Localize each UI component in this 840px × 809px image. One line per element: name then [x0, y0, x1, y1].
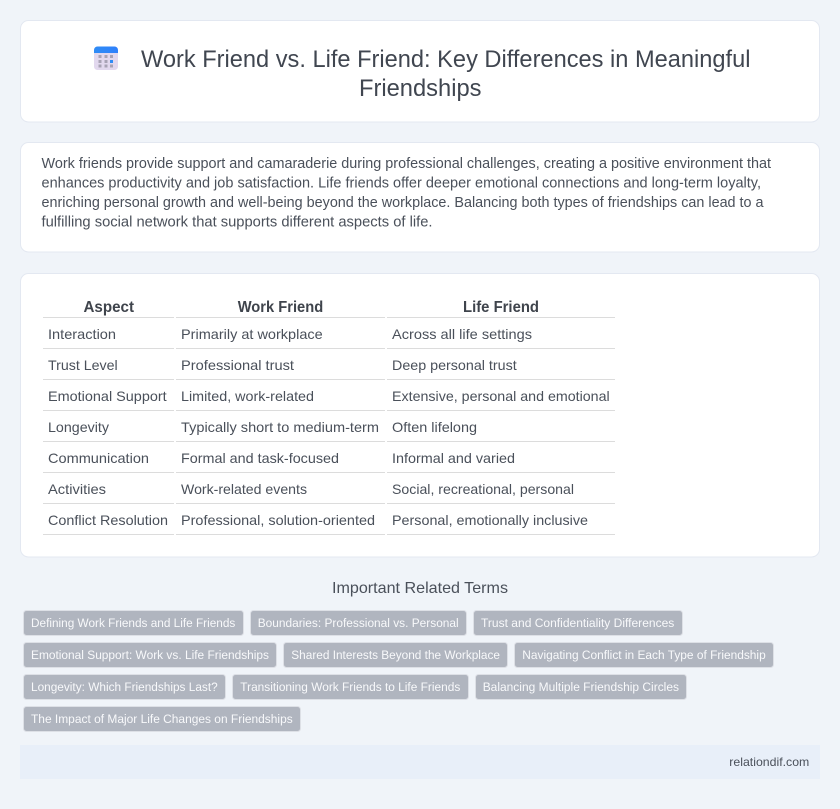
row: interaction: Primarily at workplace [181, 326, 323, 342]
row: emotional support: Limited, work-related [181, 388, 314, 404]
intro paragraph: enhances productivity and job satisfaction. Life friends offer deeper emotional connections and long-term loyalty, [42, 176, 761, 192]
table header row: Life Friend [463, 299, 539, 316]
row: communication [48, 450, 515, 466]
icon: calendar [94, 46, 118, 70]
table header row [84, 299, 539, 316]
row: longevity: Typically short to medium-term [181, 419, 379, 435]
row: interaction: Interaction [48, 326, 116, 342]
related terms tags: Balancing Multiple Friendship Circles [483, 680, 679, 694]
related terms tags: Longevity: Which Friendships Last? [31, 680, 218, 694]
row: interaction: Across all life settings [392, 326, 532, 342]
row: trust level: Professional trust [181, 357, 294, 373]
intro paragraph: enriching personal growth and well-being beyond the workplace. Balancing both types of friendships can lead to a [42, 195, 764, 211]
related terms tags: Transitioning Work Friends to Life Friends [240, 680, 460, 694]
row: longevity [48, 419, 477, 435]
table header row: Aspect [84, 299, 135, 316]
heading: important related terms: Important Related Terms [332, 580, 508, 597]
related terms tags: Defining Work Friends and Life Friends [31, 616, 235, 630]
row: longevity: Often lifelong [392, 419, 477, 435]
row: activities: Activities [48, 481, 106, 497]
row: longevity: Longevity [48, 419, 109, 435]
related terms tags: Trust and Confidentiality Differences [481, 616, 674, 630]
title: Work Friend vs. Life Friend: Key Differences in Meaningful [141, 46, 750, 73]
row: activities: Social, recreational, personal [392, 481, 574, 497]
intro paragraph: fulfilling social network that supports different aspects of life. [42, 214, 433, 230]
row: communication: Formal and task-focused [181, 450, 339, 466]
panel: comparison table [20, 274, 820, 557]
intro paragraph: Work friends provide support and camaraderie during professional challenges, creating a positive environment that [42, 156, 771, 172]
related terms tags: Navigating Conflict in Each Type of Friendship [522, 648, 766, 662]
row: conflict resolution: Personal, emotionally inclusive [392, 512, 588, 528]
intro paragraph [42, 156, 771, 230]
row: communication: Communication [48, 450, 149, 466]
row: communication: Informal and varied [392, 450, 515, 466]
related terms tags: The Impact of Major Life Changes on Friendships [31, 712, 293, 726]
panel: introduction [20, 142, 820, 252]
title: Friendships [359, 75, 482, 102]
footer: relationdif.com [729, 755, 809, 769]
row: conflict resolution [48, 512, 588, 528]
row: activities: Work-related events [181, 481, 307, 497]
footer [20, 745, 820, 779]
row: trust level [48, 357, 517, 373]
title [141, 46, 750, 102]
row: activities [48, 481, 574, 497]
row: conflict resolution: Professional, solution-oriented [181, 512, 375, 528]
row: emotional support: Emotional Support [48, 388, 167, 404]
related terms tags [24, 610, 774, 732]
row: trust level: Trust Level [48, 357, 118, 373]
row: trust level: Deep personal trust [392, 357, 517, 373]
panel: title header [20, 20, 820, 122]
related terms tags: Boundaries: Professional vs. Personal [258, 616, 459, 630]
row: emotional support: Extensive, personal and emotional [392, 388, 610, 404]
related terms tags: Shared Interests Beyond the Workplace [291, 648, 500, 662]
related terms tags: Emotional Support: Work vs. Life Friendships [31, 648, 269, 662]
table header row: Work Friend [238, 299, 323, 316]
row: interaction [48, 326, 532, 342]
row: emotional support [48, 388, 610, 404]
row: conflict resolution: Conflict Resolution [48, 512, 168, 528]
